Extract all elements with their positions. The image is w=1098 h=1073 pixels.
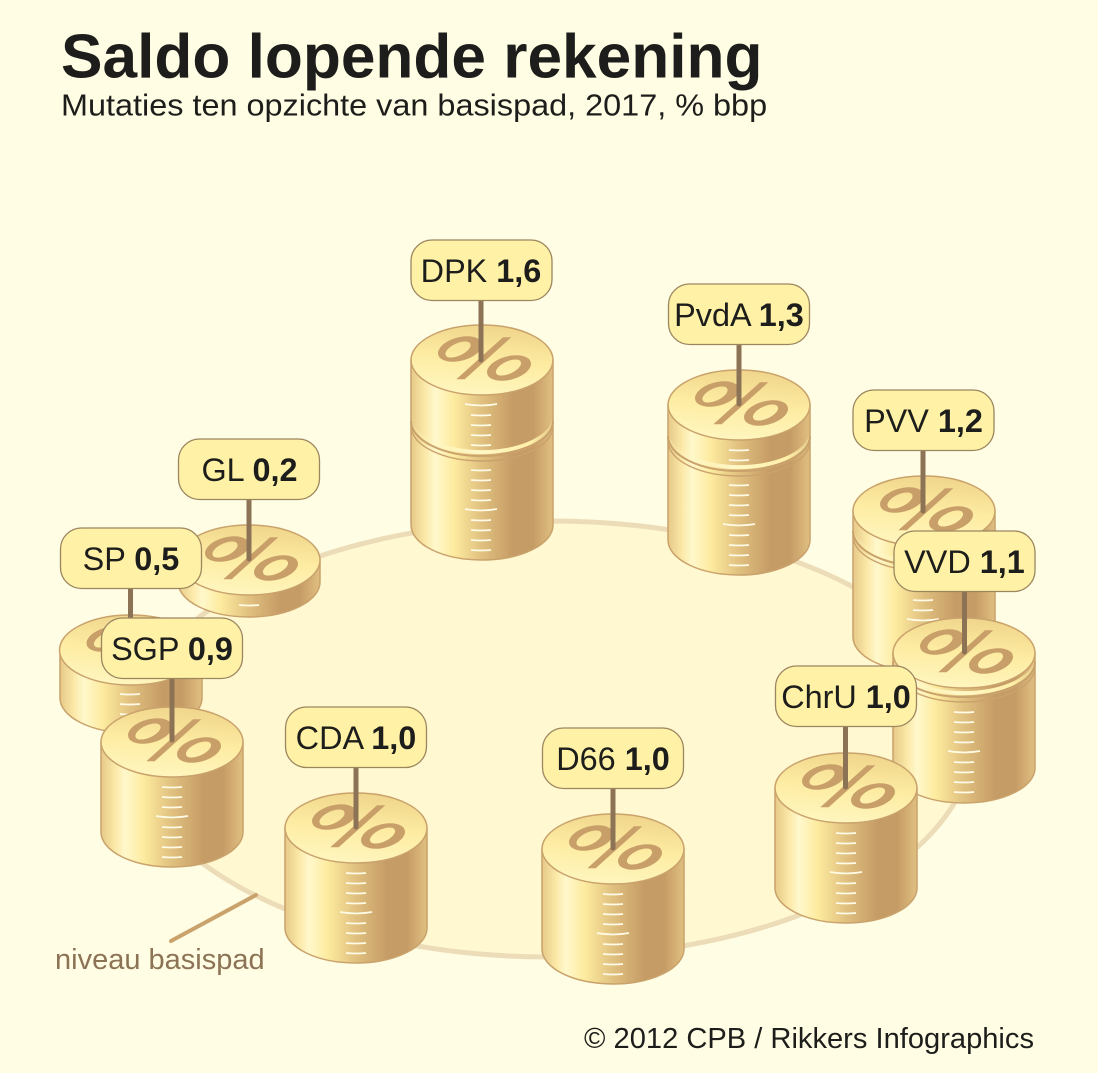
cylinder: SP — [60, 615, 202, 733]
subtitle: Mutaties ten opzichte van basispad, 2017, % bbp — [61, 88, 767, 122]
label: VVD 1,1 — [894, 531, 1035, 652]
label: GL 0,2 — [178, 439, 320, 559]
cylinder: CDA — [285, 793, 427, 963]
label: SGP 0,9 — [102, 618, 242, 740]
label: PvdA 1,3 — [668, 284, 810, 404]
label: DPK 1,6 — [411, 240, 552, 360]
title: Saldo lopende rekening — [61, 22, 762, 92]
label: CDA 1,0 — [286, 707, 426, 827]
label: VVD 1,1: VVD 1,1 — [904, 544, 1025, 580]
label: PVV 1,2: PVV 1,2 — [864, 403, 983, 439]
base ring: niveau basispad — [127, 521, 973, 957]
label: ChrU 1,0 — [776, 666, 916, 787]
cylinder: GL — [178, 525, 320, 617]
label: niveau basispad: niveau basispad — [55, 944, 265, 976]
cylinder: PVV — [853, 476, 995, 672]
credit: © 2012 CPB / Rikkers Infographics — [584, 1023, 1034, 1055]
label: CDA 1,0: CDA 1,0 — [296, 720, 416, 756]
label: SP 0,5 — [60, 528, 202, 649]
cylinder: PvdA — [668, 370, 810, 575]
cylinder: SGP — [101, 707, 243, 867]
label: ChrU 1,0: ChrU 1,0 — [781, 679, 911, 715]
label: D66 1,0: D66 1,0 — [556, 741, 670, 777]
label: SP 0,5: SP 0,5 — [83, 541, 179, 577]
cylinder: D66 — [542, 814, 684, 984]
cylinder: VVD — [893, 618, 1035, 803]
cylinder: DPK — [411, 325, 553, 560]
label: DPK 1,6: DPK 1,6 — [421, 253, 541, 289]
cylinder: ChrU — [775, 753, 917, 923]
label: GL 0,2: GL 0,2 — [201, 452, 298, 488]
label: SGP 0,9: SGP 0,9 — [111, 631, 233, 667]
label: PvdA 1,3: PvdA 1,3 — [674, 297, 804, 333]
leader line: niveau basispad — [171, 895, 256, 941]
label: PVV 1,2 — [853, 390, 994, 511]
label: D66 1,0 — [542, 728, 684, 848]
